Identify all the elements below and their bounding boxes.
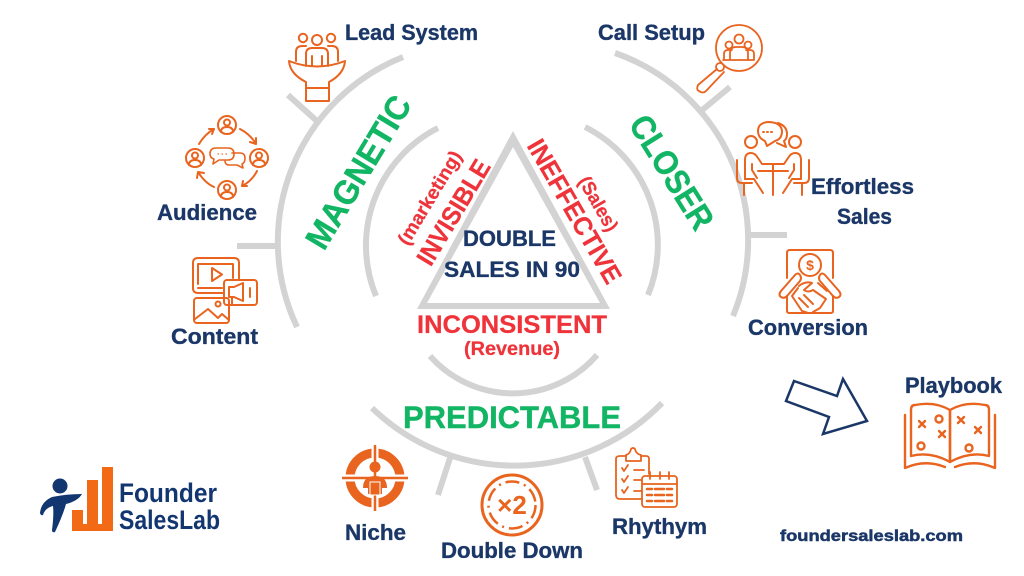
website url: foundersaleslab.com — [780, 528, 963, 545]
outer ring: magnetic, closer, predictable arcs — [237, 53, 787, 495]
label: call setup: Call Setup — [598, 20, 705, 45]
inner ring arcs — [366, 127, 658, 393]
icon: niche target — [341, 444, 409, 512]
center heading: double sales in 90: SALES IN 90 — [444, 257, 580, 282]
arrow: toward playbook — [786, 379, 867, 434]
red label: invisible marketing: INVISIBLE — [410, 154, 497, 271]
logo wordmark — [119, 478, 220, 535]
red label: invisible marketing: (marketing) — [394, 147, 467, 249]
label: effortless sales — [811, 174, 914, 229]
icon: audience circle — [186, 116, 268, 199]
icon: people in funnel — [289, 34, 345, 101]
green heading: magnetic: MAGNETIC — [298, 89, 419, 256]
logo mark: figure — [40, 478, 82, 532]
icon: magnifier with people — [697, 25, 762, 92]
red label: ineffective sales: (Sales) — [573, 173, 622, 235]
label: content: Content — [171, 324, 259, 349]
center heading: double sales in 90: DOUBLE — [463, 226, 556, 251]
icon: content media — [193, 258, 257, 323]
icon: playbook — [905, 404, 995, 468]
icon: handshake contract: $ — [806, 257, 814, 273]
icon: rhythm clipboard and calendar — [616, 448, 677, 507]
label: audience: Audience — [157, 200, 257, 225]
label: effortless sales: Effortless — [811, 174, 914, 199]
green heading: closer: CLOSER — [621, 108, 721, 237]
icon: handshake contract — [780, 250, 840, 313]
logo wordmark: SalesLab — [119, 505, 220, 535]
label: effortless sales: Sales — [837, 204, 892, 229]
logo wordmark: Founder — [119, 478, 217, 508]
logo: founder saleslab — [40, 467, 220, 535]
label: double down: Double Down — [441, 538, 583, 563]
center heading: double sales in 90 — [444, 226, 580, 282]
logo mark: bars — [72, 467, 113, 531]
red label: inconsistent revenue: (Revenue) — [464, 339, 560, 360]
green heading: predictable: PREDICTABLE — [403, 399, 621, 435]
red label: inconsistent revenue: INCONSISTENT — [417, 311, 607, 339]
label: playbook: Playbook — [905, 373, 1003, 398]
red label: ineffective sales: INEFFECTIVE — [521, 134, 628, 289]
label: niche: Niche — [345, 520, 406, 545]
icon: double down x2 — [482, 475, 542, 535]
central triangle — [417, 131, 610, 309]
icon: two people at table — [737, 122, 809, 195]
label: rhythym: Rhythym — [612, 514, 707, 539]
label: conversion: Conversion — [748, 315, 868, 340]
red label: inconsistent revenue — [417, 311, 607, 360]
icon: double down x2: ×2 — [497, 490, 527, 520]
label: lead system: Lead System — [345, 20, 478, 45]
